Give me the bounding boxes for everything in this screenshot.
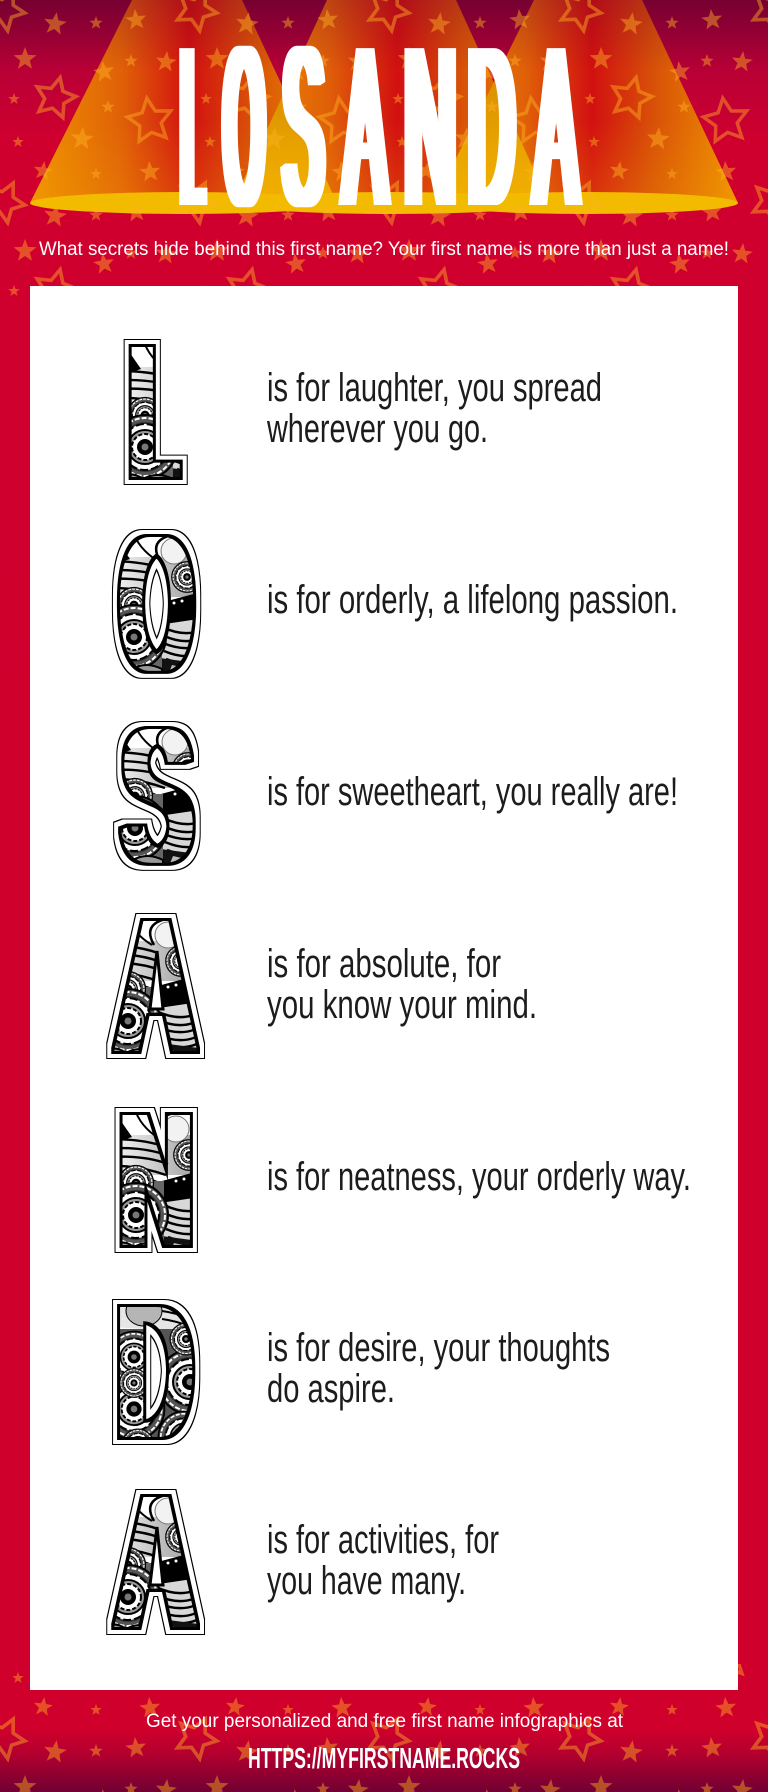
infographic canvas: A xyxy=(535,0,577,254)
title: N xyxy=(405,0,456,254)
letter O row xyxy=(102,499,678,710)
star pattern bottom xyxy=(0,1664,768,1792)
letter N row xyxy=(104,1075,691,1286)
title: O xyxy=(225,0,264,254)
letter L row xyxy=(113,307,602,518)
text: D line 2: do aspire. xyxy=(267,1367,395,1411)
icon: ornate letter N xyxy=(114,1075,198,1286)
star pattern top xyxy=(0,0,768,300)
letter A row 2 xyxy=(96,1457,499,1668)
subtitle: What secrets hide behind this first name? Your first name is more than just a name! xyxy=(39,239,729,260)
letter A row xyxy=(96,881,537,1092)
text: L line 1: is for laughter, you spread xyxy=(267,366,602,410)
text: A2 line 2: you have many. xyxy=(267,1559,466,1603)
icon: ornate letter L xyxy=(124,307,188,518)
footer url: HTTPS://MYFIRSTNAME.ROCKS xyxy=(248,1743,520,1775)
text: A line 2: you know your mind. xyxy=(267,983,537,1027)
title: D xyxy=(469,0,514,254)
text: L line 2: wherever you go. xyxy=(266,407,488,451)
footer line: Get your personalized and free first name infographics at xyxy=(146,1711,624,1732)
title: L xyxy=(182,0,203,254)
text: D line 1: is for desire, your thoughts xyxy=(267,1326,610,1370)
text: A2 line 1: is for activities, for xyxy=(267,1518,499,1562)
text: A line 1: is for absolute, for xyxy=(267,942,501,986)
title: A xyxy=(344,0,386,254)
letter S row xyxy=(103,691,678,902)
letter D row xyxy=(102,1267,610,1478)
title: S xyxy=(283,0,323,254)
spotlights xyxy=(30,0,738,214)
panel: white content area xyxy=(30,286,738,1690)
